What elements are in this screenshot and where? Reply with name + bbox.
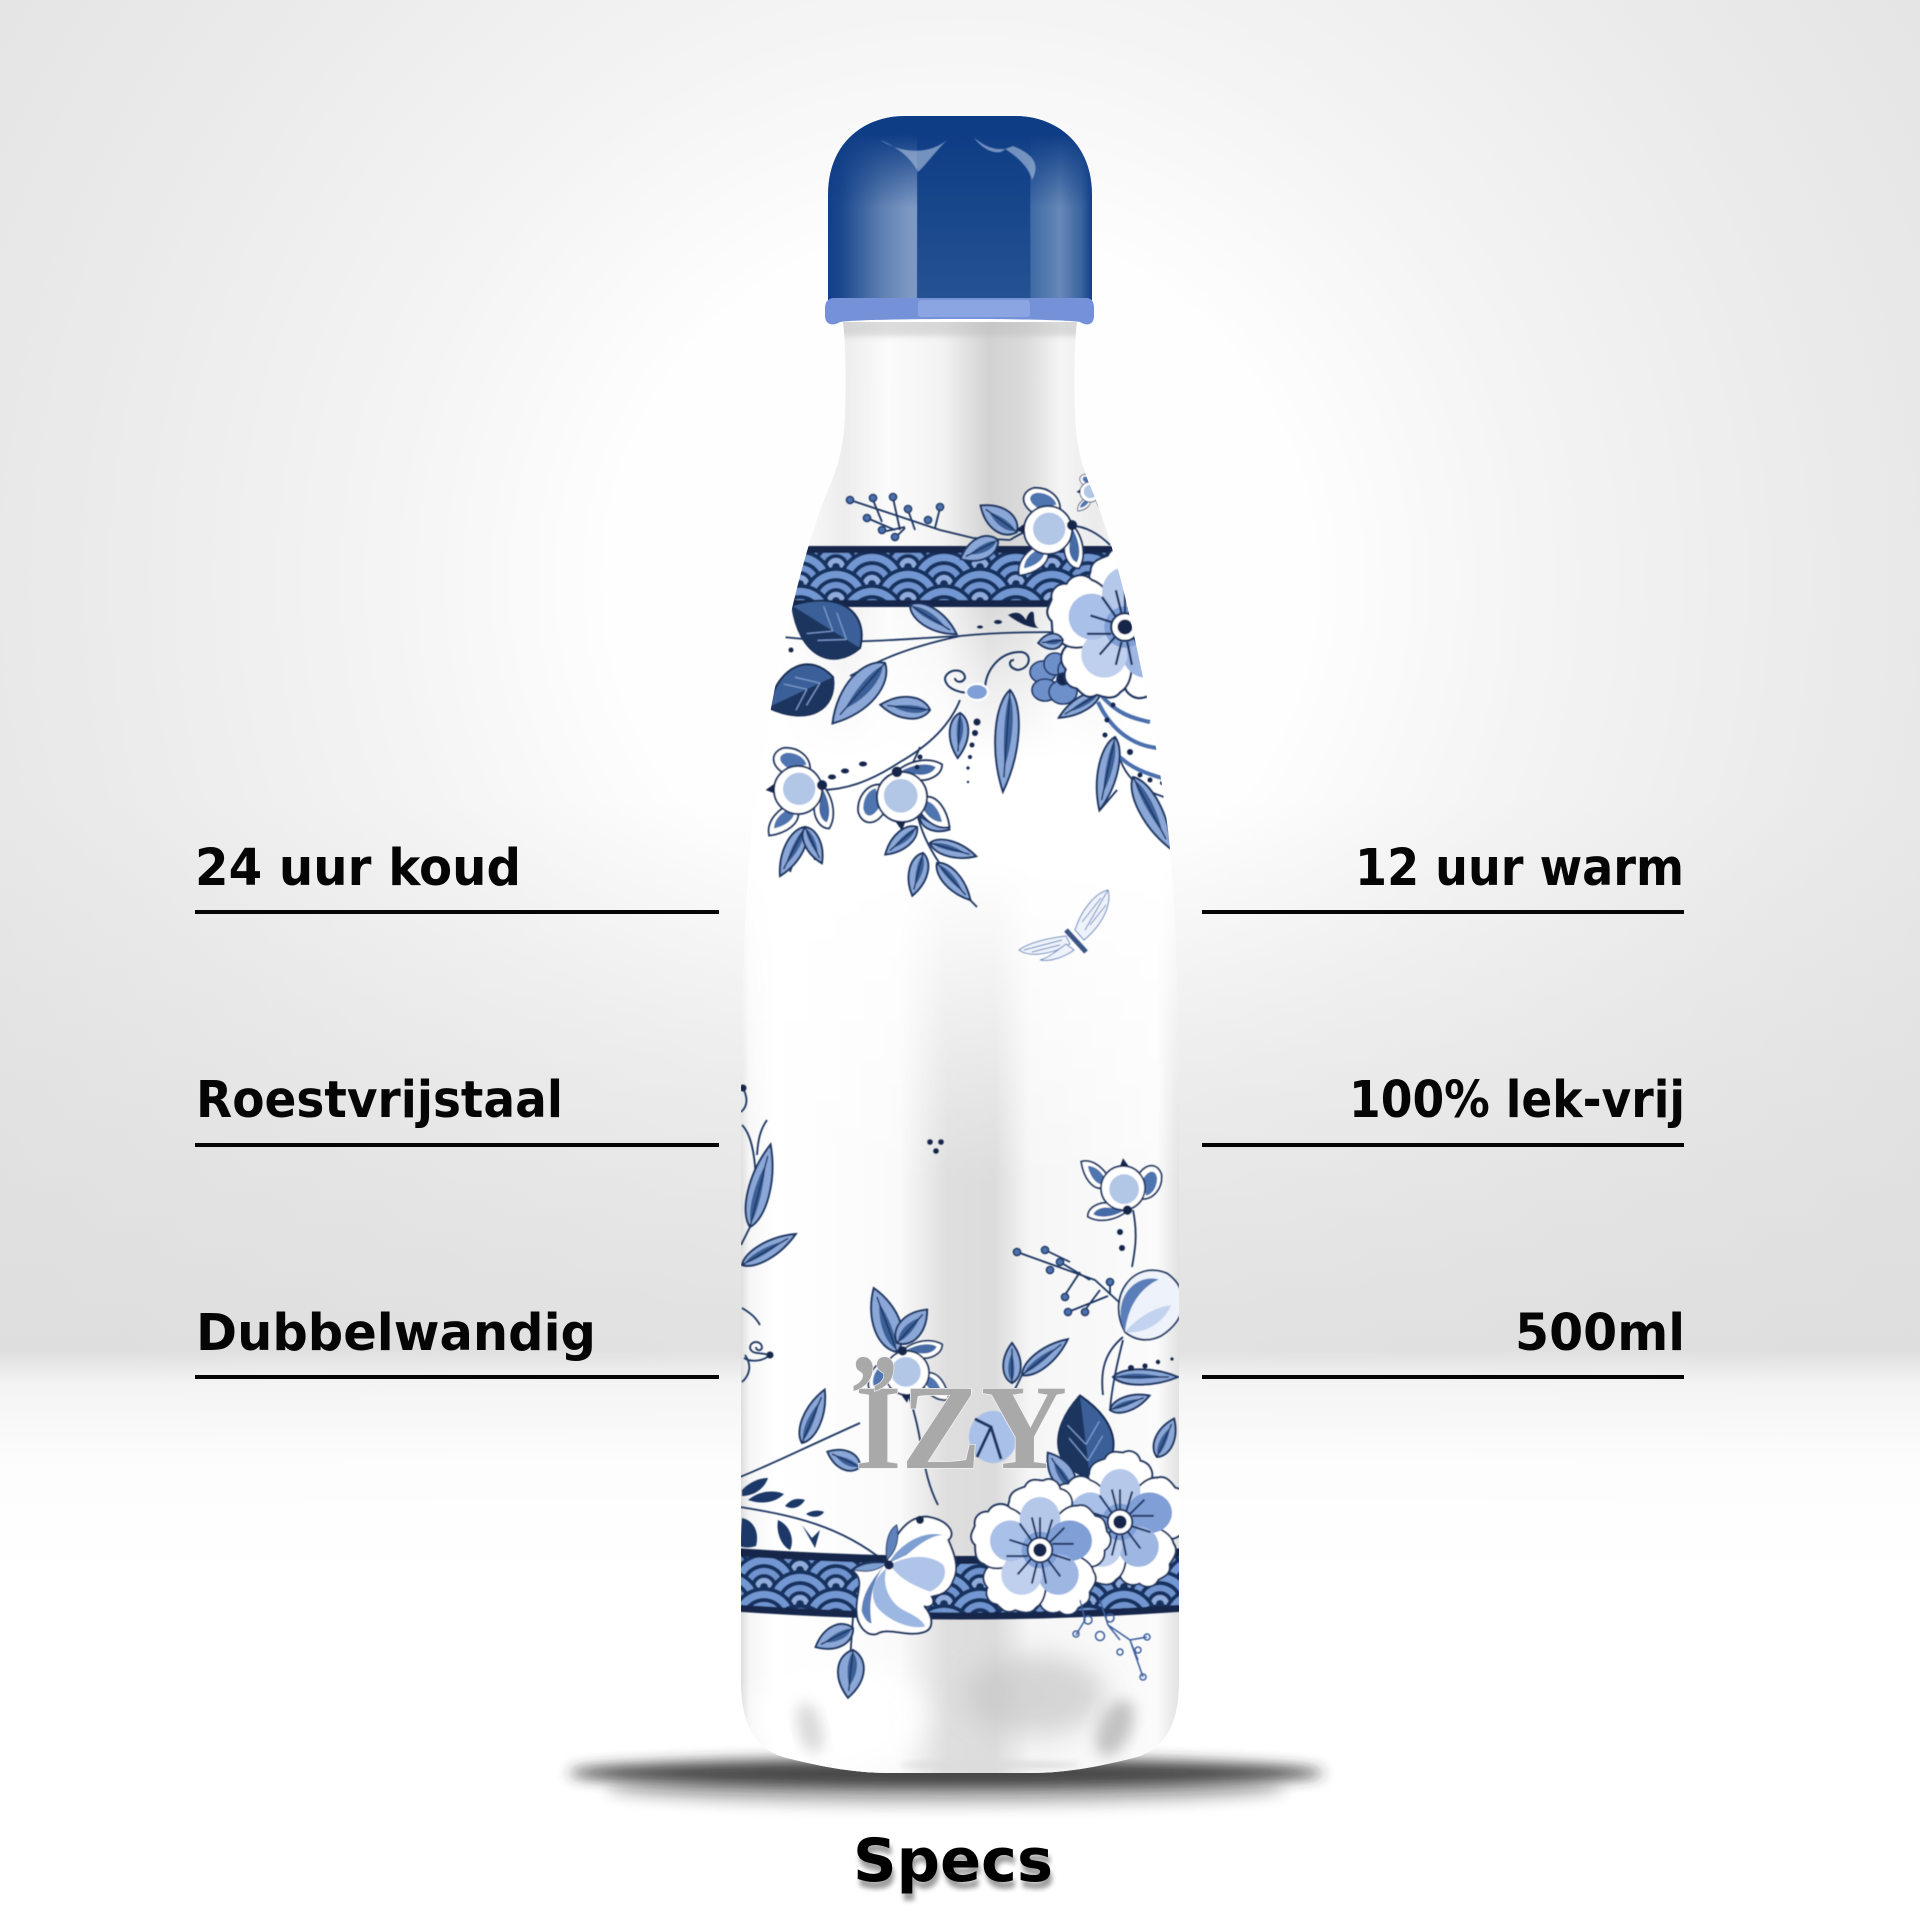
blue small flower — [1030, 653, 1080, 704]
ground shadow — [568, 1758, 1324, 1806]
berry flowers — [766, 474, 1105, 836]
cap — [825, 116, 1094, 324]
cap top highlights — [880, 138, 1036, 180]
stray dots at right — [1117, 1229, 1174, 1371]
sprig over band — [1073, 1600, 1150, 1680]
lower floral print — [736, 1158, 1197, 1699]
two large flowers — [969, 1449, 1179, 1616]
spec: 24 uur koud — [195, 839, 719, 914]
spec: 500ml — [1202, 1304, 1685, 1379]
bottom creases shading — [755, 1655, 1142, 1770]
floral print — [736, 474, 1212, 1699]
spec: Roestvrijstaal — [195, 1071, 719, 1147]
bottle body — [741, 322, 1179, 1773]
spec: Dubbelwandig: Dubbelwandig — [196, 1304, 596, 1363]
IZY logo: IZY — [855, 1361, 1067, 1495]
upper wave band — [780, 546, 1125, 607]
berry and tulip flowers — [868, 1158, 1197, 1463]
cap rim — [825, 298, 1094, 324]
spec: Roestvrijstaal: Roestvrijstaal — [196, 1071, 563, 1130]
small white leaf — [1037, 632, 1064, 651]
spec: 12 uur warm — [1202, 839, 1684, 914]
three dots — [927, 1139, 944, 1154]
spec: 500ml: 500ml — [1515, 1304, 1685, 1363]
spec: 100% lek-vrij: 100% lek-vrij — [1349, 1071, 1685, 1130]
spec: 24 uur koud: 24 uur koud — [195, 839, 521, 898]
spec: Dubbelwandig — [195, 1304, 719, 1379]
bottle — [730, 116, 1212, 1780]
cap centre facet — [918, 137, 1030, 298]
title: Specs: Specs — [853, 1826, 1053, 1896]
swirls — [945, 652, 1029, 700]
large flower — [1045, 549, 1148, 700]
moth — [1019, 890, 1109, 960]
dots and heart — [788, 612, 1164, 785]
IZY logo: ” — [850, 1333, 898, 1457]
spec: 12 uur warm: 12 uur warm — [1355, 839, 1684, 898]
cap shell — [828, 116, 1092, 300]
upper floral print — [765, 473, 1170, 908]
dark leaves left — [740, 1478, 824, 1550]
peony — [852, 1516, 956, 1634]
lower left print edge — [738, 1084, 800, 1382]
swoosh strokes beside the flower — [1096, 696, 1162, 780]
spec: 100% lek-vrij — [1202, 1071, 1685, 1147]
lower wave band — [736, 1552, 1184, 1616]
